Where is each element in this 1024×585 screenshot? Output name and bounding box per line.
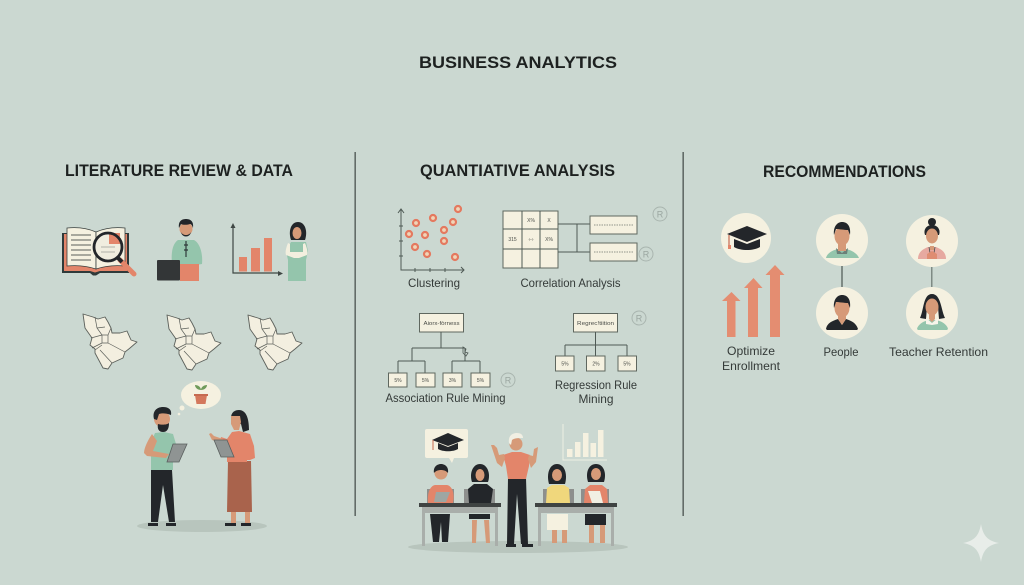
panel: quantitative analysis — [386, 161, 667, 553]
label: optimize enrollment: Optimize — [727, 344, 775, 358]
diagram: association rule tree: R — [505, 376, 512, 386]
diagram: regression rule tree: 2% — [592, 362, 600, 368]
diagram: association rule tree: 5% — [477, 378, 485, 384]
avatar: woman with hair bun — [906, 215, 958, 267]
map 1 — [83, 314, 137, 369]
diagram: regression rule tree — [556, 311, 646, 371]
woman — [209, 410, 255, 526]
label: correlation analysis: Correlation Analysis — [520, 276, 620, 290]
diagram: association rule tree — [388, 314, 515, 387]
illustration: two people with tablets — [137, 381, 267, 532]
diagram: regression rule tree: 5% — [561, 362, 569, 368]
avatar: woman with long hair — [906, 287, 958, 339]
title: BUSINESS ANALYTICS — [419, 53, 617, 72]
small bar chart — [563, 424, 607, 460]
heading: quantitative analysis: QUANTIATIVE ANALYSIS — [420, 161, 615, 180]
diagram: correlation matrix — [503, 207, 667, 268]
connector: people — [841, 266, 843, 287]
connector: teachers — [931, 267, 932, 287]
diagram: correlation matrix: ‹-› — [528, 237, 534, 243]
label: clustering: Clustering — [408, 276, 460, 290]
speech bubble with graduation cap — [425, 429, 468, 463]
desk left — [419, 503, 501, 546]
icon: sparkle watermark — [963, 524, 999, 562]
avatar: man with dark shirt — [816, 287, 868, 339]
map 3 — [248, 315, 302, 370]
desk right — [535, 503, 617, 546]
chart: bars with axes — [230, 223, 283, 276]
diagram: correlation matrix: X% — [545, 237, 553, 243]
diagram: association rule tree: 3% — [449, 378, 457, 384]
thought bubble with plant — [178, 381, 221, 415]
diagram: correlation matrix: X% — [527, 218, 535, 224]
icon: graduation cap badge — [721, 213, 771, 263]
label: association rule mining: Association Rule Mining — [386, 391, 506, 405]
teacher — [491, 433, 538, 547]
avatar: man with green shirt — [816, 214, 868, 266]
label: optimize enrollment line 2: Enrollment — [722, 359, 781, 373]
label: regression rule mining line 2: Mining — [578, 392, 614, 406]
diagram: association rule tree: 5% — [394, 378, 402, 384]
diagram: correlation matrix: X — [547, 218, 551, 224]
label: teacher retention: Teacher Retention — [889, 345, 988, 359]
diagram: association rule tree: Aiorx-fòrness — [424, 321, 460, 327]
man — [144, 407, 187, 526]
illustration: classroom — [408, 424, 628, 553]
panel: literature review and data — [62, 161, 308, 532]
diagram: regression rule tree: 5% — [623, 362, 631, 368]
icon: book with magnifier — [62, 228, 134, 276]
chart: clustering scatter — [398, 206, 464, 273]
student 3 — [543, 464, 574, 543]
label: regression rule mining: Regression Rule — [555, 378, 637, 392]
student 4 — [581, 464, 609, 543]
diagram: correlation matrix: R — [657, 210, 664, 220]
student 2 — [464, 464, 495, 543]
icon: rising arrows — [722, 265, 784, 337]
icon: woman presenting — [286, 222, 308, 281]
label: people: People — [824, 345, 859, 359]
heading: literature review: LITERATURE REVIEW & DATA — [65, 161, 293, 180]
heading: recommendations: RECOMMENDATIONS — [763, 162, 926, 181]
student 1 — [427, 464, 454, 542]
diagram: regression rule tree: R — [636, 314, 643, 324]
map 2 — [167, 315, 221, 370]
diagram: regression rule tree: Regrec!tiition — [577, 321, 614, 327]
panel: recommendations — [721, 162, 988, 373]
diagram: correlation matrix: 315 — [508, 237, 517, 243]
icon: man at laptop — [157, 219, 202, 281]
diagram: correlation matrix: R — [643, 250, 650, 260]
diagram: association rule tree: 5% — [422, 378, 430, 384]
